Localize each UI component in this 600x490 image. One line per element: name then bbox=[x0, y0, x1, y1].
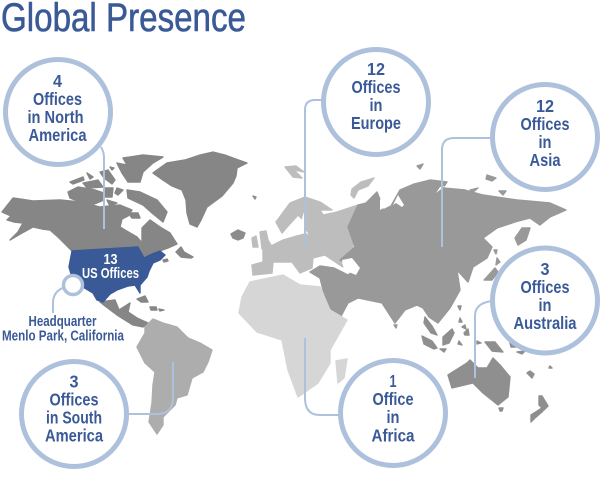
label: 13 US Offices: 13 bbox=[104, 251, 118, 268]
callout: Africa bbox=[340, 360, 446, 466]
callout: South America: Offices bbox=[50, 390, 99, 410]
connector: Africa bbox=[305, 338, 340, 415]
callout: Asia: Offices bbox=[520, 114, 570, 134]
label: headquarter: Headquarter bbox=[28, 314, 97, 330]
label: 13 US Offices bbox=[82, 251, 139, 282]
callout: Asia bbox=[492, 84, 598, 190]
connector: South America bbox=[126, 362, 173, 414]
map: Southeast Asia islands and Australia bbox=[422, 306, 552, 422]
connector: Asia bbox=[442, 138, 492, 247]
callout: North America: America bbox=[28, 125, 87, 145]
map: Caspian and Red Sea bbox=[342, 258, 360, 275]
callout: Australia: Australia bbox=[514, 313, 577, 333]
callout: North America: in North bbox=[28, 107, 84, 127]
callout: Asia: 12 bbox=[536, 96, 554, 116]
callout: South America: America bbox=[45, 426, 103, 446]
callout: Asia: Asia bbox=[530, 150, 561, 170]
callout: North America: Offices bbox=[33, 89, 82, 109]
marker: headquarter bbox=[64, 276, 82, 294]
connector: Australia bbox=[475, 301, 492, 378]
callout: Africa: 1 bbox=[390, 371, 397, 391]
connector: headquarter bbox=[53, 287, 65, 313]
map: Europe bbox=[252, 166, 374, 275]
callout: Australia: in bbox=[538, 295, 552, 315]
callout: Europe: in bbox=[370, 95, 382, 115]
map: Africa bbox=[239, 275, 347, 397]
label: headquarter: Menlo Park, California bbox=[2, 328, 125, 344]
label: 13 US Offices: US Offices bbox=[82, 265, 139, 282]
callout: Europe: 12 bbox=[367, 59, 385, 79]
map: Iceland and small Atlantic islands bbox=[231, 196, 256, 240]
callout: South America bbox=[22, 362, 126, 466]
callout: Europe: Europe bbox=[351, 113, 401, 133]
connector: Europe bbox=[305, 100, 324, 247]
callout: North America: 4 bbox=[53, 71, 62, 91]
callout: North America bbox=[6, 60, 110, 164]
connector: North America bbox=[101, 147, 104, 229]
map: Ob bay notches bbox=[380, 186, 445, 210]
callout: Europe: Offices bbox=[352, 77, 401, 97]
callout: Australia: Offices bbox=[520, 277, 570, 297]
callout: South America: 3 bbox=[70, 372, 79, 392]
world map bbox=[2, 152, 566, 434]
map: Baltic Sea bbox=[292, 212, 309, 235]
map: Greenland bbox=[153, 152, 247, 227]
callout: Australia bbox=[492, 248, 598, 353]
map: South America bbox=[137, 319, 212, 434]
callout: Australia: 3 bbox=[540, 259, 550, 279]
callout: Asia: in bbox=[538, 132, 552, 152]
map: United States bbox=[69, 247, 165, 302]
callout: South America: in South bbox=[46, 408, 102, 428]
callout: Africa: Africa bbox=[372, 426, 415, 446]
label: headquarter bbox=[2, 314, 125, 344]
callout: Africa: in bbox=[386, 407, 400, 427]
map: Central America bbox=[100, 300, 148, 327]
callout: Europe bbox=[324, 50, 428, 154]
callout: Africa: Office bbox=[372, 389, 414, 409]
map: Canada and Arctic islands bbox=[2, 152, 247, 327]
map: Asia bbox=[310, 164, 566, 328]
